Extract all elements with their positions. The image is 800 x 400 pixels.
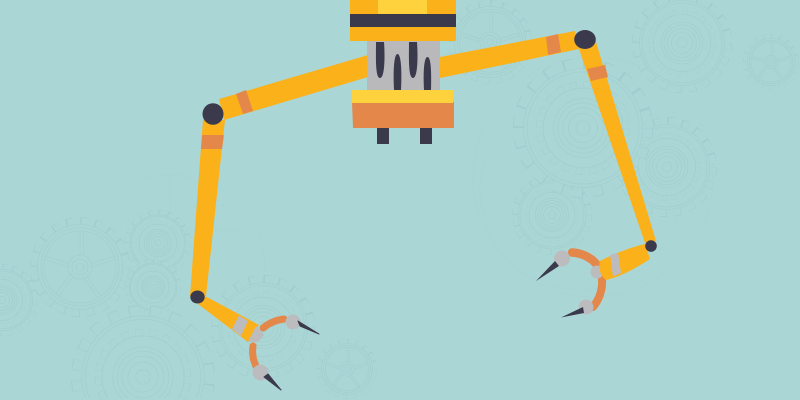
- head: dark slots: [376, 42, 431, 90]
- right claw: orange finger upper: [572, 252, 597, 265]
- head: yellow base strip: [352, 90, 453, 103]
- left arm: forearm: [190, 120, 225, 296]
- left arm: upper segment: [219, 55, 368, 120]
- right claw: grey band: [610, 252, 621, 276]
- background gears: right cluster: [451, 0, 797, 297]
- left arm: [190, 55, 368, 296]
- right arm: upper segment: [440, 31, 579, 78]
- left claw: knuckle lower: [252, 364, 268, 380]
- left claw: elbow joint: [190, 290, 205, 304]
- right claw: orange finger lower: [593, 279, 602, 307]
- left claw: grey band: [232, 316, 248, 336]
- head: dark band: [350, 14, 456, 27]
- left claw: orange finger lower: [253, 346, 256, 366]
- right arm: upper orange band: [546, 34, 561, 55]
- left claw: spike upper: [298, 321, 319, 334]
- right claw: spike lower: [561, 307, 584, 318]
- right arm: lower segment: [578, 42, 656, 243]
- right claw: wrist knob: [590, 266, 604, 278]
- left claw: wrist segment: [198, 296, 259, 342]
- background gears: left cluster: [0, 175, 375, 398]
- right claw: spike upper: [536, 261, 559, 281]
- left claw: knuckle upper: [286, 314, 300, 330]
- right claw: [536, 240, 657, 318]
- right arm: shoulder joint: [574, 30, 596, 49]
- right claw: wrist joint: [645, 240, 657, 252]
- head: top yellow housing: [350, 0, 456, 41]
- right claw: wrist segment: [599, 244, 650, 280]
- head: orange base: [352, 102, 454, 128]
- right claw: knuckle lower: [578, 300, 594, 314]
- left claw: [190, 290, 319, 390]
- right arm: [440, 30, 656, 243]
- left arm: shoulder joint: [202, 103, 224, 125]
- right arm: lower orange band: [587, 65, 608, 81]
- central gripper head: [350, 0, 456, 144]
- left arm: forearm orange band: [201, 135, 224, 149]
- left claw: orange finger upper: [263, 319, 284, 328]
- head: light yellow cap: [378, 0, 427, 14]
- right claw: knuckle upper: [554, 250, 570, 266]
- left claw: spike lower: [264, 374, 281, 390]
- left claw: wrist knob: [248, 326, 264, 342]
- left arm: upper orange band: [236, 90, 253, 114]
- head: grey column: [367, 41, 440, 91]
- head: base legs: [377, 128, 432, 144]
